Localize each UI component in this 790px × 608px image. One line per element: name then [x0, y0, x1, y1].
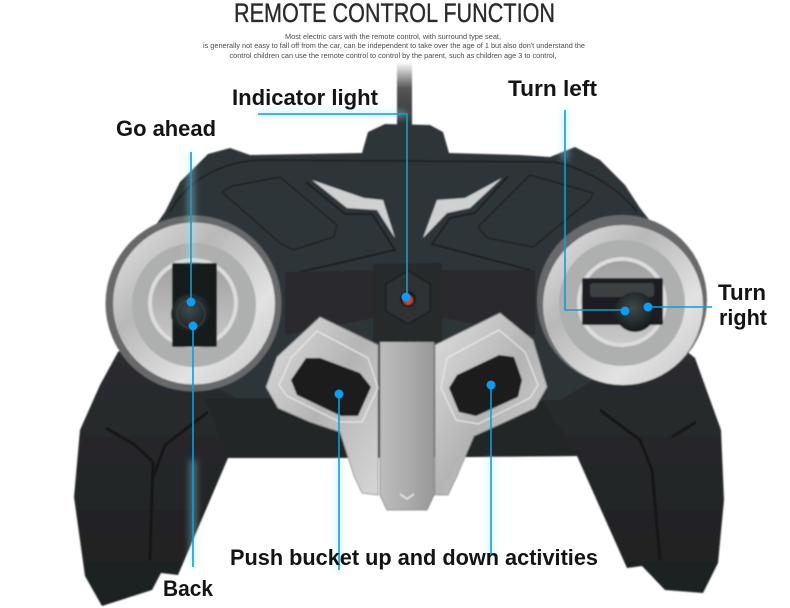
top panel left — [222, 177, 337, 250]
label: turn right — [718, 280, 768, 330]
silver mask left — [266, 317, 378, 495]
grip grooves — [106, 410, 696, 560]
indicator block — [373, 263, 442, 342]
silver wing left — [312, 180, 395, 238]
indicator hexagon — [386, 271, 430, 324]
mid shadow block — [285, 270, 535, 335]
center silver strip — [380, 340, 434, 510]
description text — [203, 32, 585, 60]
top panel right — [478, 175, 593, 247]
upper body — [130, 124, 665, 400]
cable — [397, 62, 412, 128]
label: turn left: Turn left — [508, 76, 598, 101]
label: indicator light: Indicator light — [232, 85, 379, 110]
callout: right bucket line — [486, 380, 496, 556]
description text: control children can use the remote control to control by the parent, such as children age 3 to control, — [230, 51, 556, 60]
label: go ahead: Go ahead — [116, 116, 216, 141]
right push button — [449, 355, 522, 416]
callout glow — [191, 110, 565, 570]
callout: turn right line — [644, 302, 712, 312]
left push button — [291, 358, 371, 416]
shoulder arc — [170, 160, 637, 212]
down chevron — [400, 494, 414, 499]
callout: back line — [188, 322, 198, 567]
label: turn right: Turn — [718, 280, 766, 305]
indicator lamp — [400, 291, 416, 307]
mask inner outlines — [279, 330, 538, 424]
grips and lower body — [74, 330, 724, 606]
description text: Most electric cars with the remote control, with surround type seat, — [285, 32, 501, 41]
silver wing right — [423, 178, 502, 238]
description text: is generally not easy to fall off from the car, can be independent to take over the age of 1 but also don't understand the — [203, 41, 585, 50]
left stick — [106, 216, 282, 392]
lower shadow band — [205, 398, 578, 458]
wing shadow lines — [300, 176, 530, 272]
callout: go ahead line — [186, 152, 196, 306]
right stick — [537, 215, 707, 385]
callout: turn left line — [565, 110, 630, 316]
label: turn right: right — [719, 305, 768, 330]
label: back: Back — [163, 576, 214, 601]
silver mask right — [435, 313, 547, 495]
callout: left bucket line — [334, 390, 344, 570]
callout: indicator line — [258, 114, 410, 302]
remote controller — [74, 62, 724, 606]
label: push bucket: Push bucket up and down activities — [230, 545, 598, 570]
